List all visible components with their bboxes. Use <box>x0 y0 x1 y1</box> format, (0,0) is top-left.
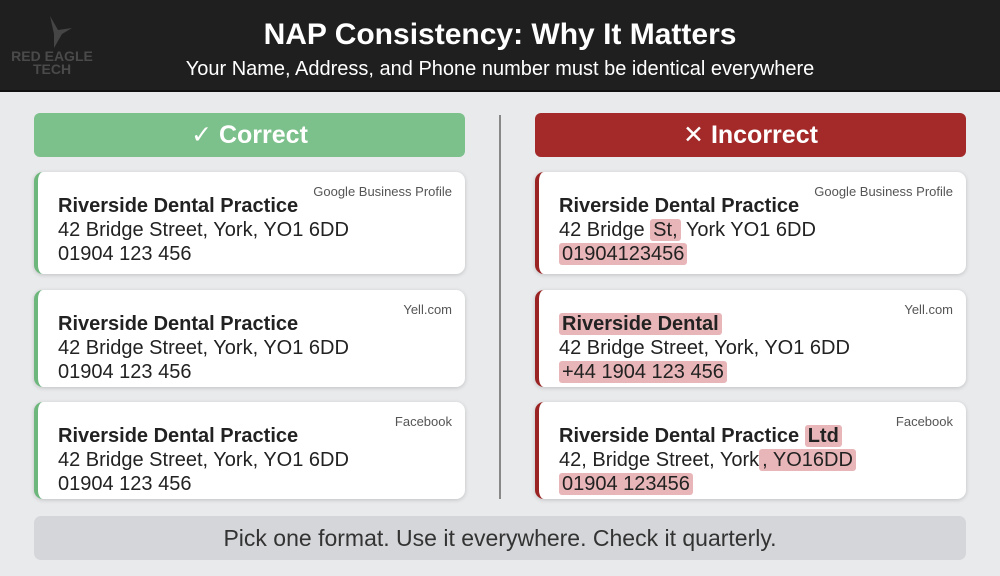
heading: incorrect <box>535 113 966 157</box>
title: NAP Consistency: Why It Matters <box>264 18 736 51</box>
card: correct google: 01904 123 456 <box>58 243 191 265</box>
card: correct google: Riverside Dental Practice <box>58 195 298 217</box>
card: incorrect facebook: 42, Bridge Street, York, YO16DD <box>559 449 853 471</box>
card: incorrect google <box>535 172 966 274</box>
card: incorrect google: 42 Bridge St, York YO1 6DD <box>559 219 816 241</box>
card: correct yell: 01904 123 456 <box>58 361 191 383</box>
header <box>0 0 1000 92</box>
card: incorrect facebook <box>535 402 966 499</box>
subtitle: Your Name, Address, and Phone number must be identical everywhere <box>186 58 814 80</box>
card: correct yell: 42 Bridge Street, York, YO1 6DD <box>58 337 349 359</box>
card: correct google: Google Business Profile <box>313 184 452 199</box>
logo: TECH <box>33 61 71 77</box>
card: incorrect facebook: Facebook <box>896 414 953 429</box>
card: correct facebook: Riverside Dental Practice <box>58 425 298 447</box>
card: incorrect yell: Riverside Dental <box>562 313 719 335</box>
card: correct facebook <box>34 402 465 499</box>
card: correct facebook: 42 Bridge Street, York, YO1 6DD <box>58 449 349 471</box>
card: incorrect yell <box>535 290 966 387</box>
divider <box>499 115 501 499</box>
heading: correct: ✓ Correct <box>191 121 308 149</box>
card: incorrect facebook: Riverside Dental Practice Ltd <box>559 425 839 447</box>
card: incorrect google: Google Business Profile <box>814 184 953 199</box>
card: incorrect facebook: 01904 123456 <box>562 473 690 495</box>
card: correct facebook: 01904 123 456 <box>58 473 191 495</box>
logo <box>11 16 93 77</box>
card: incorrect yell: +44 1904 123 456 <box>562 361 724 383</box>
card: correct google <box>34 172 465 274</box>
logo: RED EAGLE <box>11 48 93 64</box>
card: incorrect google: 01904123456 <box>562 243 684 265</box>
heading: correct <box>34 113 465 157</box>
card: incorrect yell: Yell.com <box>904 302 953 317</box>
footer <box>34 516 966 560</box>
card: correct yell: Riverside Dental Practice <box>58 313 298 335</box>
card: correct google: 42 Bridge Street, York, YO1 6DD <box>58 219 349 241</box>
card: incorrect google: Riverside Dental Practice <box>559 195 799 217</box>
footer: Pick one format. Use it everywhere. Check it quarterly. <box>223 525 777 551</box>
heading: incorrect: ✕ Incorrect <box>683 121 818 149</box>
card: correct facebook: Facebook <box>395 414 452 429</box>
card: correct yell <box>34 290 465 387</box>
card: incorrect yell: 42 Bridge Street, York, YO1 6DD <box>559 337 850 359</box>
card: correct yell: Yell.com <box>403 302 452 317</box>
